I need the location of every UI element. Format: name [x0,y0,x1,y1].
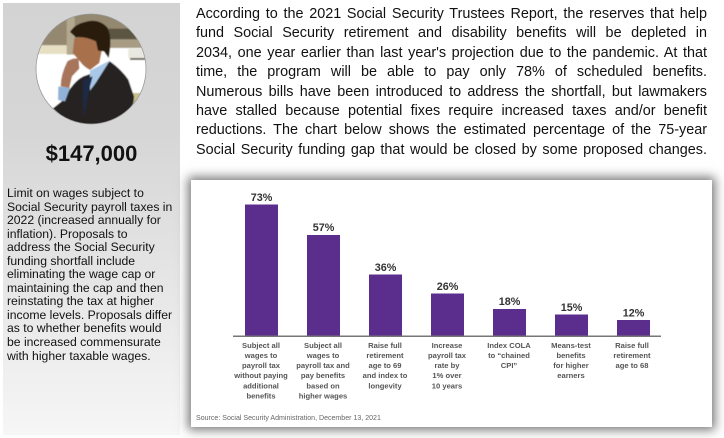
text block: wage cap explanation: eliminating the wage cap or [7,267,155,281]
category labels: retirement [366,351,404,360]
category labels: without paying [233,371,288,380]
category labels: payroll tax [428,351,467,360]
category labels: to “chained [488,351,530,360]
category labels: Raise full [615,341,649,350]
category labels: Means-test [551,341,591,350]
text block: wage cap explanation: with higher taxable wages. [7,349,151,363]
text block: wage cap explanation [7,186,172,363]
category labels: age to 69 [369,361,401,370]
bars [245,204,650,336]
panel: chart card [191,180,712,427]
category labels: payroll tax [242,361,281,370]
source note: Source: Social Security Administration, December 13, 2021 [196,415,381,422]
category labels: age to 68 [616,361,648,370]
value labels: 15% [561,302,583,314]
text block: wage cap explanation: address the Social Security [7,240,155,254]
category labels: based on [306,381,340,390]
value labels: 73% [251,192,273,204]
text block: intro paragraph: 2034, one year earlier than last year's projection due to the pandemic. At that [196,45,707,61]
category labels: 10 years [432,381,462,390]
text block: intro paragraph: According to the 2021 Social Security Trustees Report, the reserves that help [196,6,707,22]
category labels: retirement [613,351,651,360]
category labels: and index to [363,371,408,380]
category labels: Subject all [304,341,342,350]
text block: wage cap explanation: reinstating the tax at higher [7,294,154,308]
text block: wage cap explanation: Limit on wages subject to [7,186,144,200]
text block: wage cap explanation: as to whether benefits would [7,321,161,335]
heading: wage cap amount: $147,000 [46,141,137,166]
text block: intro paragraph [196,6,707,158]
value labels [251,192,645,320]
panel: wage cap sidebar [3,3,180,435]
category labels: benefits [556,351,586,360]
text block: intro paragraph: fund Social Security retirement and disability benefits will be depleted in [196,25,707,41]
category labels: pay benefits [301,371,345,380]
text block: wage cap explanation: maintaining the cap and then [7,281,164,295]
icon: circular photo of man in suit [36,14,146,124]
category labels: additional [243,381,279,390]
category labels: rate by [435,361,460,370]
value labels: 12% [623,308,645,320]
category labels: Subject all [242,341,280,350]
text block: intro paragraph: time, the program will be able to pay only 78% of scheduled benefits. [196,64,707,80]
text block: wage cap explanation: inflation). Proposals to [7,227,128,241]
category labels: 1% over [432,371,462,380]
value labels: 26% [437,281,459,293]
text block: wage cap explanation: funding shortfall include [7,254,135,268]
category labels: earners [557,371,585,380]
category labels: payroll tax and [296,361,350,370]
text block: wage cap explanation: income levels. Proposals differ [7,308,172,322]
value labels: 18% [499,296,521,308]
category labels: Index COLA [487,341,531,350]
text block: intro paragraph: Social Security funding gap that would be closed by some proposed changes. [196,142,707,158]
text block: intro paragraph: Numerous bills have been introduced to address the shortfall, but lawmakers [196,84,707,100]
category labels: Increase [432,341,462,350]
text block: wage cap explanation: Social Security payroll taxes in [7,200,172,214]
value labels: 57% [313,222,335,234]
category labels [233,341,651,400]
category labels: benefits [246,391,276,400]
text block: wage cap explanation: be increased commensurate [7,335,161,349]
category labels: Raise full [368,341,402,350]
category labels: CPI” [501,361,517,370]
text block: intro paragraph: have stalled because potential fixes require increased taxes and/or benefit [196,103,707,119]
category labels: higher wages [299,391,347,400]
category labels: wages to [306,351,340,360]
category labels: wages to [244,351,278,360]
text block: intro paragraph: reductions. The chart below shows the estimated percentage of the 75-year [196,122,707,138]
category labels: for higher [553,361,589,370]
value labels: 36% [375,262,397,274]
category labels: longevity [368,381,402,390]
text block: wage cap explanation: 2022 (increased annually for [7,213,161,227]
